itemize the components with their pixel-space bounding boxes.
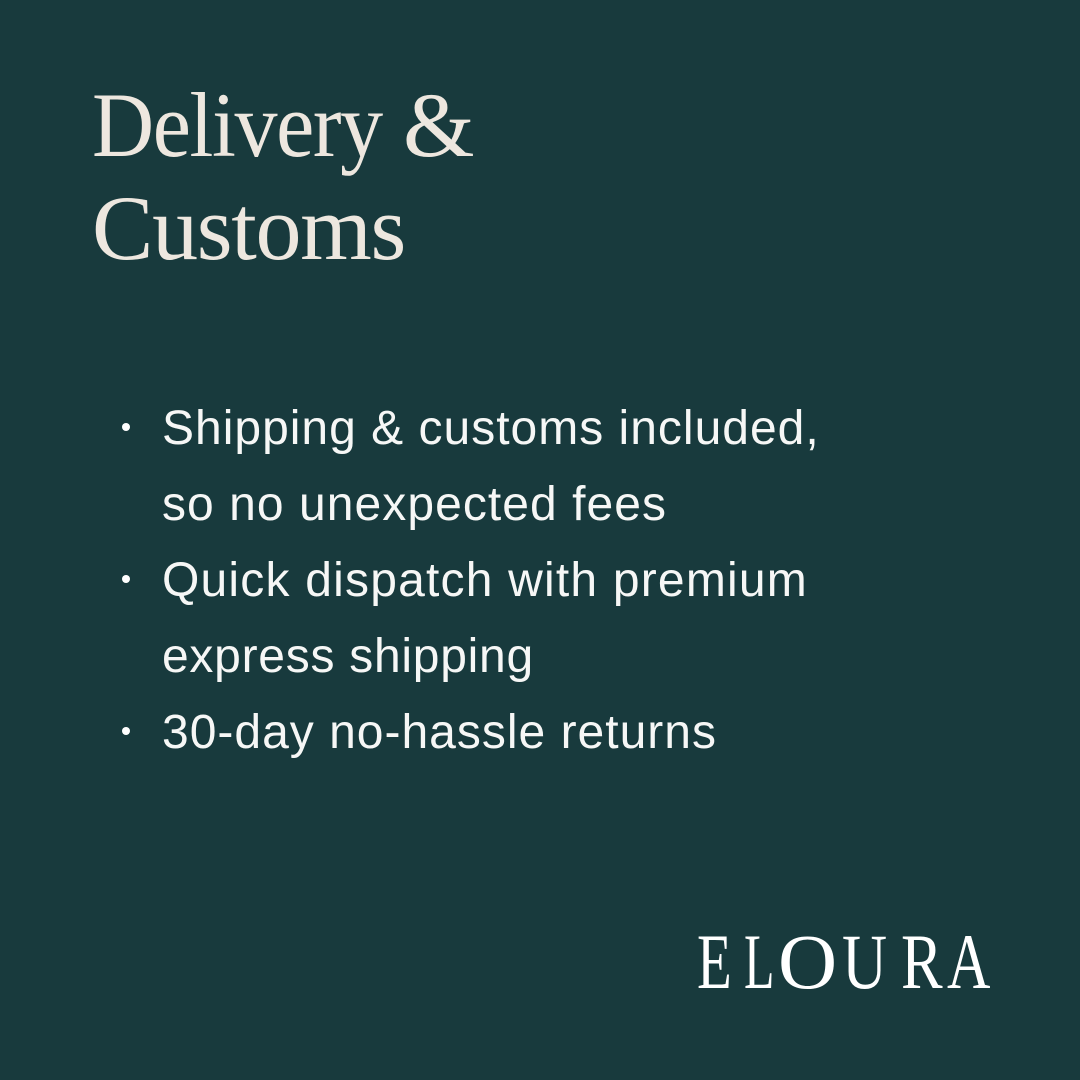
logo wordmark: L <box>744 918 774 1005</box>
bullet list <box>122 402 820 759</box>
bullet list: Shipping & customs included, <box>162 402 820 455</box>
title <box>92 74 475 279</box>
logo wordmark: E <box>697 918 732 1005</box>
bullet list: express shipping <box>162 630 534 683</box>
title: Delivery <box>92 74 382 176</box>
title: & <box>403 74 475 176</box>
bullet list: 30-day no-hassle returns <box>162 706 717 759</box>
logo wordmark: U <box>842 918 887 1005</box>
bullet list: so no unexpected fees <box>162 478 667 531</box>
logo wordmark: A <box>947 918 990 1005</box>
title: Customs <box>92 177 405 279</box>
bullet list: Quick dispatch with premium <box>162 554 808 607</box>
logo wordmark: R <box>901 918 943 1005</box>
logo wordmark: O <box>778 918 837 1005</box>
logo wordmark <box>697 918 990 1005</box>
